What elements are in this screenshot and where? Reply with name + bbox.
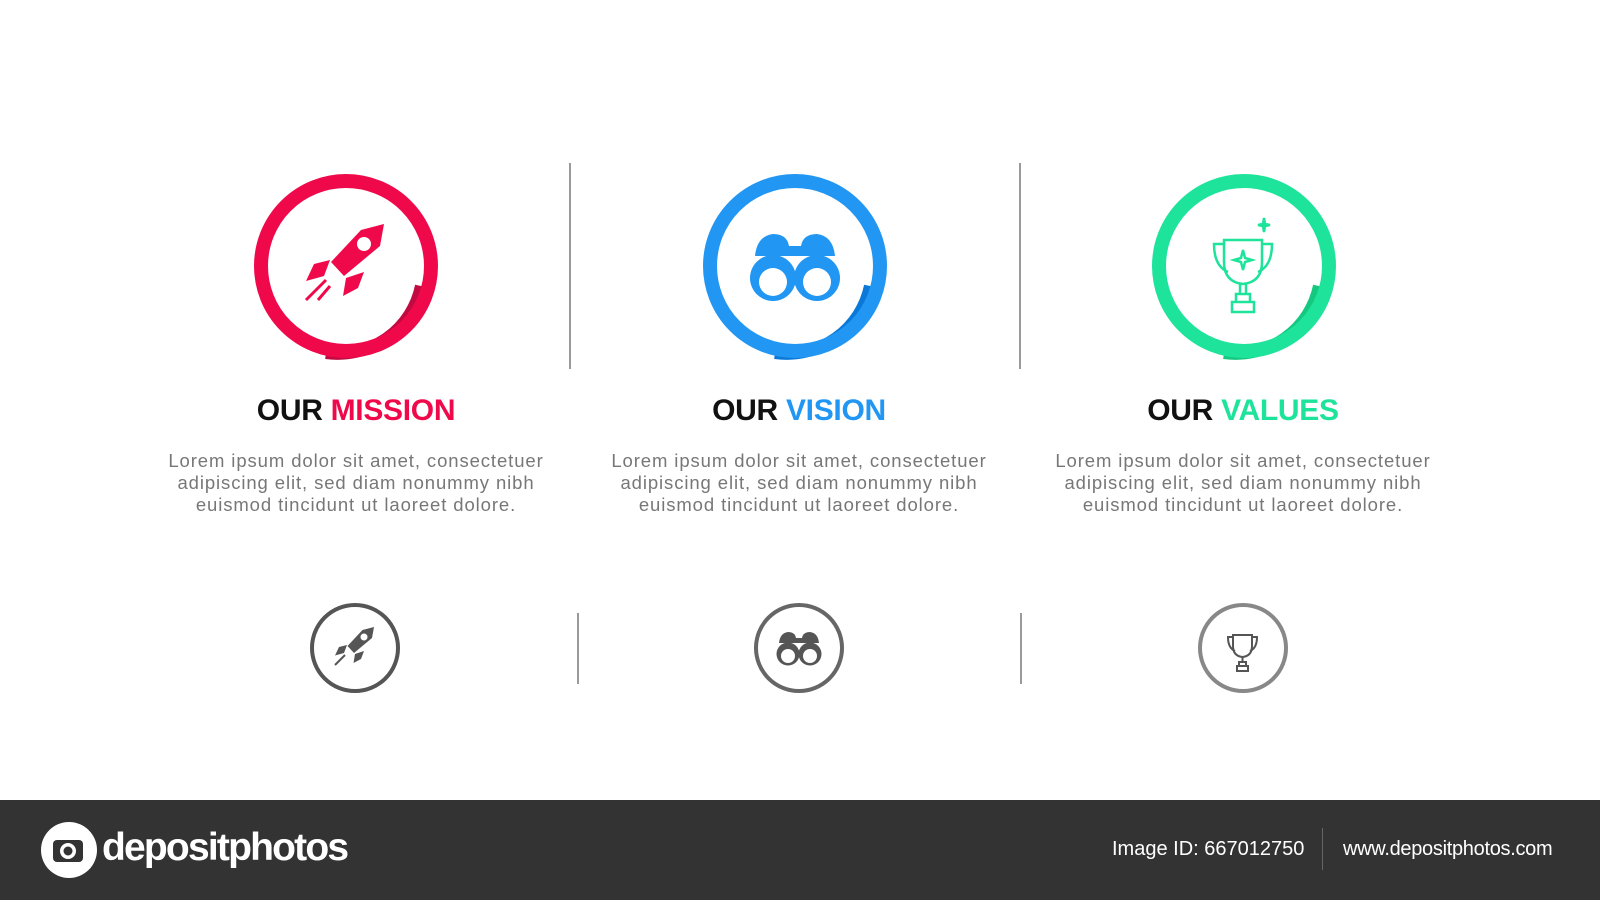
text: vision body: euismod tincidunt ut laoreet dolore. <box>639 494 959 515</box>
text: image id: Image ID: 667012750 <box>1112 838 1304 860</box>
icon: mission rocket circle <box>254 174 438 360</box>
icon: vision binoculars circle <box>703 174 887 360</box>
heading: our values: OUR VALUES <box>1147 394 1339 427</box>
icon: small binoculars <box>754 603 844 693</box>
text: mission body: adipiscing elit, sed diam nonummy nibh <box>177 472 535 493</box>
divider: bottom left <box>577 613 579 684</box>
text: vision body: adipiscing elit, sed diam nonummy nibh <box>620 472 978 493</box>
text: values body: Lorem ipsum dolor sit amet, consectetuer <box>1055 450 1431 471</box>
logo: depositphotos: depositphotos <box>102 826 347 869</box>
text: mission body <box>168 450 544 515</box>
icon: small rocket <box>310 603 400 693</box>
footer bar <box>0 800 1600 900</box>
text: values body: euismod tincidunt ut laoreet dolore. <box>1083 494 1403 515</box>
text: values body <box>1055 450 1431 515</box>
text: vision body <box>611 450 987 515</box>
icon: values trophy circle <box>1152 174 1336 360</box>
text: mission body: Lorem ipsum dolor sit amet, consectetuer <box>168 450 544 471</box>
icon: small trophy <box>1198 603 1288 693</box>
divider: bottom right <box>1020 613 1022 684</box>
divider: top left <box>569 163 571 369</box>
text: vision body: Lorem ipsum dolor sit amet, consectetuer <box>611 450 987 471</box>
text: values body: adipiscing elit, sed diam nonummy nibh <box>1064 472 1422 493</box>
text: url: www.depositphotos.com <box>1343 838 1552 860</box>
heading: our mission: OUR MISSION <box>257 394 455 427</box>
heading: our vision: OUR VISION <box>712 394 886 427</box>
divider: top right <box>1019 163 1021 369</box>
logo: depositphotos <box>41 822 348 878</box>
text: mission body: euismod tincidunt ut laoreet dolore. <box>196 494 516 515</box>
